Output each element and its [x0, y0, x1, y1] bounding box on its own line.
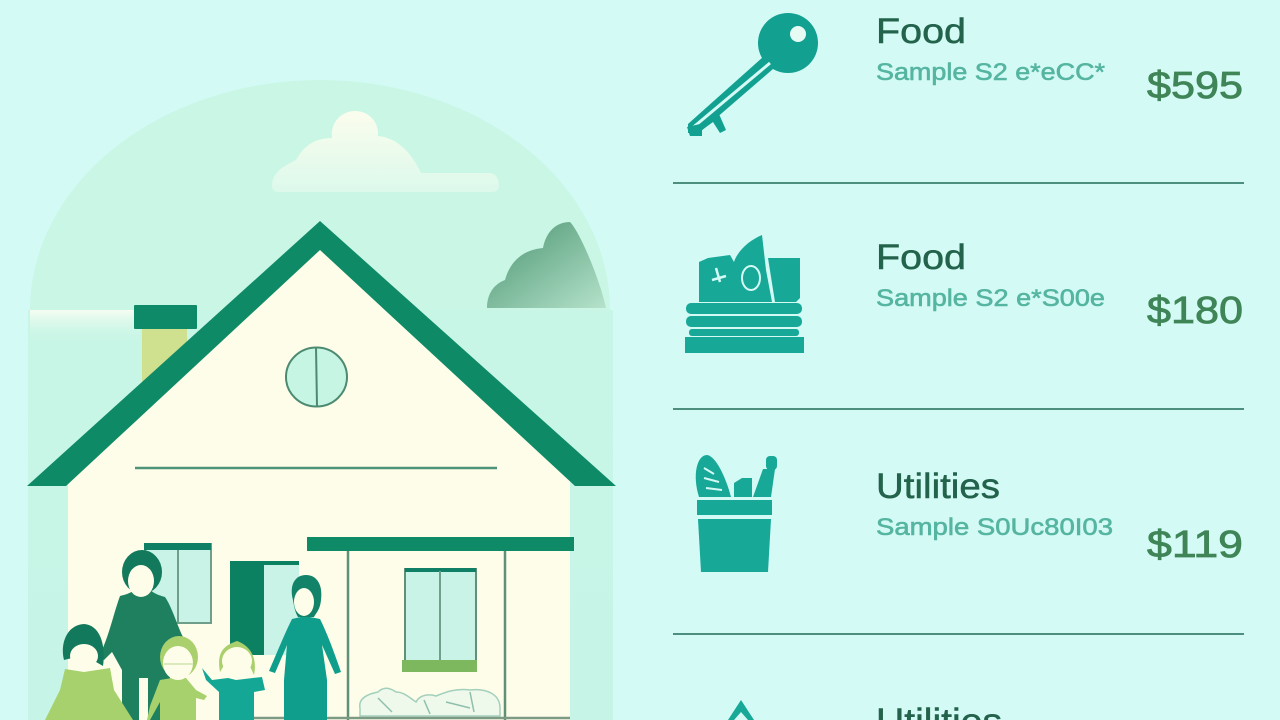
ground line [253, 717, 570, 719]
row: grocery bag item [696, 455, 1243, 572]
right window [402, 568, 477, 672]
icon: grocery bucket [696, 455, 777, 572]
person: father [99, 550, 183, 720]
cloud: green [487, 222, 606, 308]
cloud: white [272, 111, 499, 192]
roof [27, 221, 616, 486]
label: Food [876, 238, 966, 277]
wall line [135, 467, 497, 469]
divider [673, 182, 1244, 184]
white haze band [30, 310, 140, 344]
row: key icon item [687, 12, 1243, 136]
amount: $595 [1147, 65, 1243, 107]
amount: $180 [1147, 290, 1243, 332]
label: Food [876, 12, 966, 51]
icon: key [687, 13, 818, 136]
divider [673, 633, 1244, 635]
round attic window [286, 347, 347, 406]
porch posts [348, 550, 505, 720]
illustration: house and family [27, 80, 616, 720]
house wall [68, 240, 570, 720]
lower sky band [28, 310, 613, 720]
left window [144, 543, 211, 623]
door [230, 561, 299, 655]
bushes [360, 688, 500, 716]
icon: money stack [685, 235, 804, 353]
sky arch [30, 80, 610, 310]
label: Utilities [876, 467, 1000, 506]
description: Sample S2 e*S00e [876, 285, 1105, 312]
description: Sample S0Uc80I03 [876, 514, 1113, 541]
person: boy [202, 641, 265, 720]
chimney [134, 305, 197, 390]
person: left child [45, 624, 133, 720]
amount: $119 [1147, 524, 1243, 566]
icon: triangle [728, 700, 754, 720]
description: Sample S2 e*eCC* [876, 59, 1105, 86]
row: utilities item, clipped [728, 700, 1002, 720]
person: girl [147, 636, 207, 720]
person: mother [269, 575, 341, 720]
porch roof [307, 537, 574, 551]
divider [673, 408, 1244, 410]
row: groceries stack item [685, 235, 1243, 353]
